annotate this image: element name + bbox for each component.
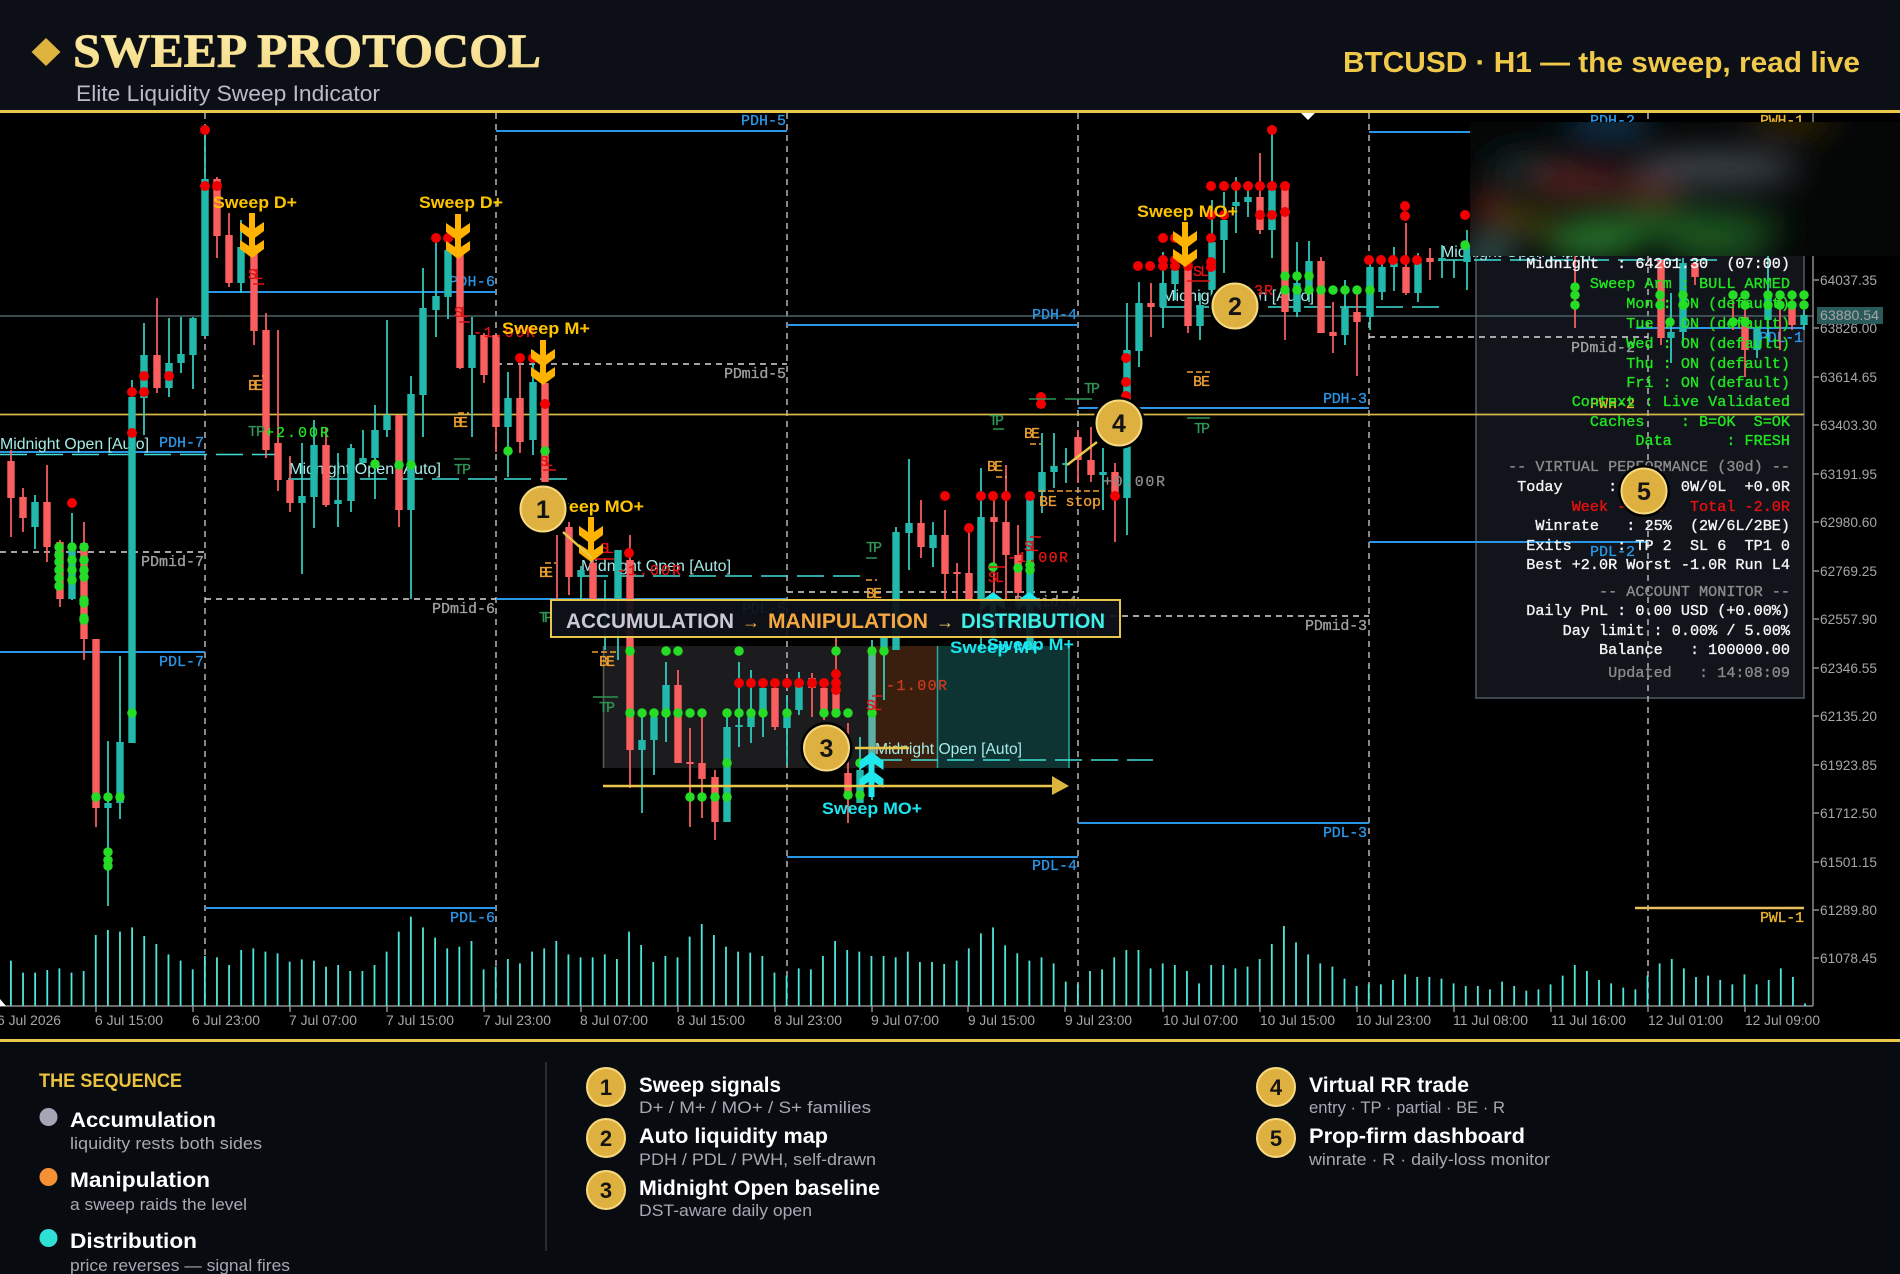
key 1: sweep signals xyxy=(587,1068,871,1117)
dashboard text: Winrate : 25% (2W/6L/2BE) xyxy=(1535,517,1790,535)
key 4: virtual RR trade xyxy=(1257,1068,1505,1117)
banner: accumulation manipulation distribution: → xyxy=(742,612,760,632)
icon: chart shift markers xyxy=(0,113,1315,1006)
callout 4: 4 xyxy=(1112,410,1126,438)
trade annotations SL BE TP R: SL xyxy=(1024,539,1039,556)
price axis labels: 63403.30 xyxy=(1820,418,1877,433)
trade annotations SL BE TP R: TP xyxy=(1194,421,1210,438)
legend: distribution: Distribution xyxy=(70,1230,197,1253)
sweep signal labels and arrows: Sweep M+ xyxy=(987,635,1074,654)
trade annotations SL BE TP R: TP xyxy=(454,462,471,479)
trade annotations SL BE TP R: BE xyxy=(453,415,468,432)
liquidity levels PDH PDL PDmid PWH PWL: PDmid-2 xyxy=(1571,340,1635,357)
footer panel xyxy=(0,1039,1900,1274)
legend: accumulation: Accumulation xyxy=(70,1109,216,1132)
key 2: auto liquidity map xyxy=(587,1119,876,1169)
subtitle: Elite Liquidity Sweep Indicator xyxy=(76,81,380,106)
time axis labels: 6 Jul 23:00 xyxy=(192,1013,260,1028)
price axis labels: 61078.45 xyxy=(1820,951,1877,966)
sweep signal labels and arrows: Sweep D+ xyxy=(213,193,297,212)
price axis labels: 62135.20 xyxy=(1820,709,1877,724)
callout leader lines xyxy=(563,442,1097,748)
midnight open dashed baselines: Midnight Open [Auto] xyxy=(1162,288,1314,305)
price axis labels: 62557.90 xyxy=(1820,612,1877,627)
time axis labels: 10 Jul 07:00 xyxy=(1163,1013,1238,1028)
time axis labels: 7 Jul 07:00 xyxy=(289,1013,357,1028)
midnight open dashed baselines: Midnight Open [Auto] xyxy=(581,558,731,575)
time axis labels: 8 Jul 07:00 xyxy=(580,1013,648,1028)
trade annotations SL BE TP R: 3R xyxy=(1254,283,1273,300)
time axis labels: 12 Jul 09:00 xyxy=(1745,1013,1820,1028)
key 4: virtual RR trade: entry · TP · partial · BE · R xyxy=(1309,1099,1505,1117)
key 5: prop-firm dashboard: Prop-firm dashboard xyxy=(1309,1125,1525,1148)
liquidity levels PDH PDL PDmid PWH PWL: PDL-3 xyxy=(1323,825,1367,842)
header gold rule xyxy=(0,110,1900,113)
liquidity levels PDH PDL PDmid PWH PWL: PDH-3 xyxy=(1323,391,1367,408)
trade annotations SL BE TP R: -1.00R xyxy=(473,325,535,342)
dashboard text: Balance : 100000.00 xyxy=(1599,641,1790,659)
trade annotations SL BE TP R: -1.00R xyxy=(617,563,681,580)
banner: accumulation manipulation distribution: MANIPULATION xyxy=(768,610,928,633)
dashboard text: -- ACCOUNT MONITOR -- xyxy=(1599,583,1790,601)
dashboard text: Today : 0W/0L +0.0R xyxy=(1517,478,1790,496)
time axis labels: 12 Jul 01:00 xyxy=(1648,1013,1723,1028)
title: SWEEP PROTOCOL xyxy=(73,25,541,78)
dashboard text: Mon : ON (default) xyxy=(1626,295,1790,313)
key 2: auto liquidity map: 2 xyxy=(600,1126,612,1151)
key 1: sweep signals: 1 xyxy=(600,1075,612,1100)
chart background xyxy=(0,113,1900,1040)
liquidity levels PDH PDL PDmid PWH PWL: PWL-1 xyxy=(1760,910,1804,927)
sweep signal labels and arrows: Sweep MO+ xyxy=(822,799,922,818)
time axis labels: 7 Jul 15:00 xyxy=(386,1013,454,1028)
key 3: midnight open baseline: 3 xyxy=(600,1178,612,1203)
icon: buy arrows xyxy=(860,592,1041,797)
trade annotations SL BE TP R: SL xyxy=(540,454,553,471)
liquidity levels PDH PDL PDmid PWH PWL: PDL-7 xyxy=(159,654,204,671)
candle bodies: red xyxy=(11,179,1792,822)
price axis labels: 62769.25 xyxy=(1820,564,1877,579)
dashboard text: Fri : ON (default) xyxy=(1626,374,1790,392)
banner: accumulation manipulation distribution xyxy=(551,600,1120,637)
callout 1 xyxy=(517,483,569,535)
icon: gold diamond xyxy=(32,38,60,66)
trade annotations SL BE TP R: SL xyxy=(454,305,469,322)
candle bodies: teal xyxy=(35,179,1804,822)
price axis labels: 61501.15 xyxy=(1820,855,1877,870)
dashboard text: Daily PnL : 0.00 USD (+0.00%) xyxy=(1526,602,1790,620)
trade annotations SL BE TP R: SL xyxy=(988,570,1004,587)
trade annotations SL BE TP R: TP xyxy=(248,424,265,441)
banner: accumulation manipulation distribution: → xyxy=(936,612,954,632)
dashboard text xyxy=(1508,255,1791,682)
signal dots: red highs xyxy=(72,130,1465,690)
sweep signal labels and arrows: Sweep M+ xyxy=(502,319,590,338)
price axis labels: 61712.50 xyxy=(1820,806,1877,821)
dashboard text: Wed : ON (default) xyxy=(1626,335,1790,353)
dashboard text: Midnight : 64201.30 (07:00) xyxy=(1526,255,1790,273)
signal dots: green lows xyxy=(59,245,1804,866)
time axis labels: 8 Jul 15:00 xyxy=(677,1013,745,1028)
midnight open dashed baselines: Midnight Open [Auto] xyxy=(289,461,441,478)
dashboard text: Context : Live Validated xyxy=(1572,393,1790,411)
time axis labels: 9 Jul 23:00 xyxy=(1065,1013,1132,1028)
legend: accumulation: liquidity rests both sides xyxy=(70,1135,262,1153)
time axis labels: 7 Jul 23:00 xyxy=(483,1013,551,1028)
trade annotations SL BE TP R: BE xyxy=(1193,374,1210,391)
current price tag: 63880.54 xyxy=(1820,308,1880,323)
key 4: virtual RR trade: Virtual RR trade xyxy=(1309,1074,1469,1097)
liquidity levels PDH PDL PDmid PWH PWL: PDH-7 xyxy=(159,435,204,452)
liquidity levels PDH PDL PDmid PWH PWL: PDL-5 xyxy=(742,601,786,618)
banner: accumulation manipulation distribution: ACCUMULATION xyxy=(566,610,734,633)
time axis labels: 10 Jul 23:00 xyxy=(1356,1013,1431,1028)
callout 5 xyxy=(1618,465,1670,517)
callout 3 xyxy=(800,722,852,774)
time axis labels xyxy=(0,1013,1820,1028)
trade annotations SL BE TP R: SL xyxy=(248,267,263,284)
key 3: midnight open baseline xyxy=(587,1171,880,1220)
trade annotations SL BE TP R: BE xyxy=(866,586,882,603)
callout 2: 2 xyxy=(1228,293,1242,321)
liquidity levels PDH PDL PDmid PWH PWL xyxy=(0,113,1804,927)
candle bodies: translucent signal candle xyxy=(868,651,876,763)
callout 3: 3 xyxy=(820,735,833,763)
price axis labels: 62346.55 xyxy=(1820,661,1877,676)
session grid and axes xyxy=(0,113,1819,1012)
price axis labels: 61289.80 xyxy=(1820,903,1877,918)
dashboard text: Week -2.0R Total -2.0R xyxy=(1572,498,1790,516)
legend: manipulation: Manipulation xyxy=(70,1169,210,1192)
callout 4 xyxy=(1093,397,1145,449)
trade annotations SL BE TP R xyxy=(248,264,1273,717)
key 4: virtual RR trade: 4 xyxy=(1270,1075,1283,1100)
candle wicks: teal xyxy=(35,130,1804,906)
liquidity levels PDH PDL PDmid PWH PWL: PDmid-3 xyxy=(1305,618,1367,635)
key 5: prop-firm dashboard: 5 xyxy=(1270,1126,1282,1151)
trade annotations SL BE TP R: -1.00R xyxy=(1007,550,1068,567)
callout 2 xyxy=(1209,280,1261,332)
legend: manipulation xyxy=(40,1168,247,1214)
zones: accumulation, manipulation, distribution xyxy=(603,646,1069,768)
key 5: prop-firm dashboard: winrate · R · daily-loss monitor xyxy=(1308,1151,1551,1169)
panel: prop-firm dashboard backdrop xyxy=(1476,250,1804,698)
liquidity levels PDH PDL PDmid PWH PWL: PDL-2 xyxy=(1590,544,1635,561)
trade annotations SL BE TP R: TP xyxy=(989,413,1004,430)
redacted blurred region xyxy=(1470,122,1850,256)
sweep signal labels and arrows: Sweep M+ xyxy=(950,638,1040,657)
key 1: sweep signals: Sweep signals xyxy=(639,1074,781,1097)
candlesticks xyxy=(11,130,1804,906)
key 2: auto liquidity map: PDH / PDL / PWH, self-drawn xyxy=(639,1151,876,1169)
price axis labels: 63826.00 xyxy=(1820,321,1877,336)
dashboard text: Day limit : 0.00% / 5.00% xyxy=(1563,622,1791,640)
sweep signal labels and arrows: Sweep MO+ xyxy=(543,497,644,516)
trade annotations SL BE TP R: -1.00R xyxy=(886,678,947,695)
liquidity levels PDH PDL PDmid PWH PWL: PDmid-6 xyxy=(432,601,495,618)
dashboard text: Updated : 14:08:09 xyxy=(1608,664,1790,682)
header band xyxy=(0,0,1900,110)
arrow: accumulation to distribution time span xyxy=(603,776,1069,795)
liquidity levels PDH PDL PDmid PWH PWL: PDH-4 xyxy=(1032,307,1077,324)
trade annotations SL BE TP R: BE xyxy=(1024,426,1040,443)
trade annotations SL BE TP R: BE xyxy=(248,378,263,395)
liquidity levels PDH PDL PDmid PWH PWL: PWH-1 xyxy=(1760,113,1804,130)
legend: accumulation xyxy=(40,1108,262,1153)
liquidity levels PDH PDL PDmid PWH PWL: PWH-2 xyxy=(1590,396,1635,413)
time axis labels: 9 Jul 15:00 xyxy=(968,1013,1035,1028)
price axis labels: 64037.35 xyxy=(1820,273,1877,288)
dashboard text: Tue : ON (default) xyxy=(1626,315,1790,333)
key 3: midnight open baseline: Midnight Open baseline xyxy=(639,1177,880,1200)
dashboard text: Thu : ON (default) xyxy=(1626,355,1790,373)
key 1: sweep signals: D+ / M+ / MO+ / S+ families xyxy=(639,1099,871,1117)
callout 1: 1 xyxy=(536,496,550,524)
time axis labels: 8 Jul 23:00 xyxy=(774,1013,842,1028)
time axis labels: 10 Jul 15:00 xyxy=(1260,1013,1335,1028)
icon: sell arrows xyxy=(240,213,1197,562)
time axis labels: 11 Jul 08:00 xyxy=(1453,1013,1528,1028)
liquidity levels PDH PDL PDmid PWH PWL: PDmid-5 xyxy=(724,366,786,383)
trade annotations SL BE TP R: SL xyxy=(1193,264,1209,281)
trade annotations SL BE TP R: TP xyxy=(599,700,615,717)
trade annotations SL BE TP R: SL xyxy=(866,698,882,715)
sweep signal labels and arrows: Sweep MO+ xyxy=(1137,202,1238,221)
price axis labels: 62980.60 xyxy=(1820,515,1877,530)
price axis labels: 63614.65 xyxy=(1820,370,1877,385)
key 5: prop-firm dashboard xyxy=(1257,1119,1551,1169)
midnight open dashed baselines: Midnight Open [Auto] xyxy=(875,741,1022,758)
liquidity levels PDH PDL PDmid PWH PWL: PDH-2 xyxy=(1590,113,1635,130)
dashboard text: Data : FRESH xyxy=(1635,432,1790,450)
key 3: midnight open baseline: DST-aware daily open xyxy=(639,1202,812,1220)
dashboard text: Sweep Arm : BULL ARMED xyxy=(1590,275,1790,293)
volume histogram xyxy=(11,917,1805,1006)
trade annotations SL BE TP R: TP xyxy=(539,610,553,627)
liquidity levels PDH PDL PDmid PWH PWL: PDmid-7 xyxy=(141,554,204,571)
legend: distribution xyxy=(40,1229,290,1274)
trade annotations SL BE TP R: TP xyxy=(866,540,882,557)
midnight open dashed baselines xyxy=(0,244,1720,760)
sweep signal labels and arrows: Sweep D+ xyxy=(419,193,503,212)
trade annotations SL BE TP R: BE xyxy=(539,565,553,582)
trade annotations SL BE TP R: TP xyxy=(1084,381,1100,398)
time axis labels: 6 Jul 15:00 xyxy=(95,1013,163,1028)
liquidity levels PDH PDL PDmid PWH PWL: PDL-4 xyxy=(1032,858,1077,875)
trade annotations SL BE TP R: SL xyxy=(600,541,614,558)
liquidity levels PDH PDL PDmid PWH PWL: PDH-5 xyxy=(741,113,786,130)
price axis labels: 63191.95 xyxy=(1820,467,1877,482)
key 2: auto liquidity map: Auto liquidity map xyxy=(639,1125,828,1148)
midnight open dashed baselines: Midnight Open [Auto] xyxy=(1441,244,1591,261)
liquidity levels PDH PDL PDmid PWH PWL: PDL-6 xyxy=(450,910,495,927)
trade annotations SL BE TP R: +0.00R xyxy=(1103,474,1165,491)
midnight open dashed baselines: Midnight Open [Auto] xyxy=(0,436,149,453)
dashboard text: Best +2.0R Worst -1.0R Run L4 xyxy=(1526,556,1790,574)
banner: accumulation manipulation distribution: DISTRIBUTION xyxy=(961,610,1105,633)
candle wicks: red xyxy=(11,153,1792,840)
trade annotations SL BE TP R: BE xyxy=(987,459,1003,476)
header tagline: BTCUSD · H1 — the sweep, read live xyxy=(1343,47,1860,79)
heading: the sequence: THE SEQUENCE xyxy=(39,1071,182,1092)
trade annotations SL BE TP R: +2.00R xyxy=(265,425,329,442)
dashboard text: -- VIRTUAL PERFORMANCE (30d) -- xyxy=(1508,458,1790,476)
dashboard text: Caches : B=OK S=OK xyxy=(1590,413,1791,431)
callout 5: 5 xyxy=(1637,478,1651,506)
liquidity levels PDH PDL PDmid PWH PWL: PDH-6 xyxy=(449,274,495,291)
legend: manipulation: a sweep raids the level xyxy=(70,1196,247,1214)
trade annotations SL BE TP R: BE xyxy=(599,654,615,671)
dashboard text: Exits : TP 2 SL 6 TP1 0 xyxy=(1526,537,1790,555)
time axis labels: 11 Jul 16:00 xyxy=(1551,1013,1626,1028)
liquidity levels PDH PDL PDmid PWH PWL: PDL-1 xyxy=(1759,330,1803,347)
trade annotations SL BE TP R: BE stop xyxy=(1039,494,1101,511)
sweep signal labels and arrows xyxy=(213,193,1238,818)
price axis labels xyxy=(1820,273,1877,966)
time axis labels: 9 Jul 07:00 xyxy=(871,1013,939,1028)
price axis labels: 61923.85 xyxy=(1820,758,1877,773)
liquidity levels PDH PDL PDmid PWH PWL: PDmid-4 xyxy=(1014,594,1077,611)
